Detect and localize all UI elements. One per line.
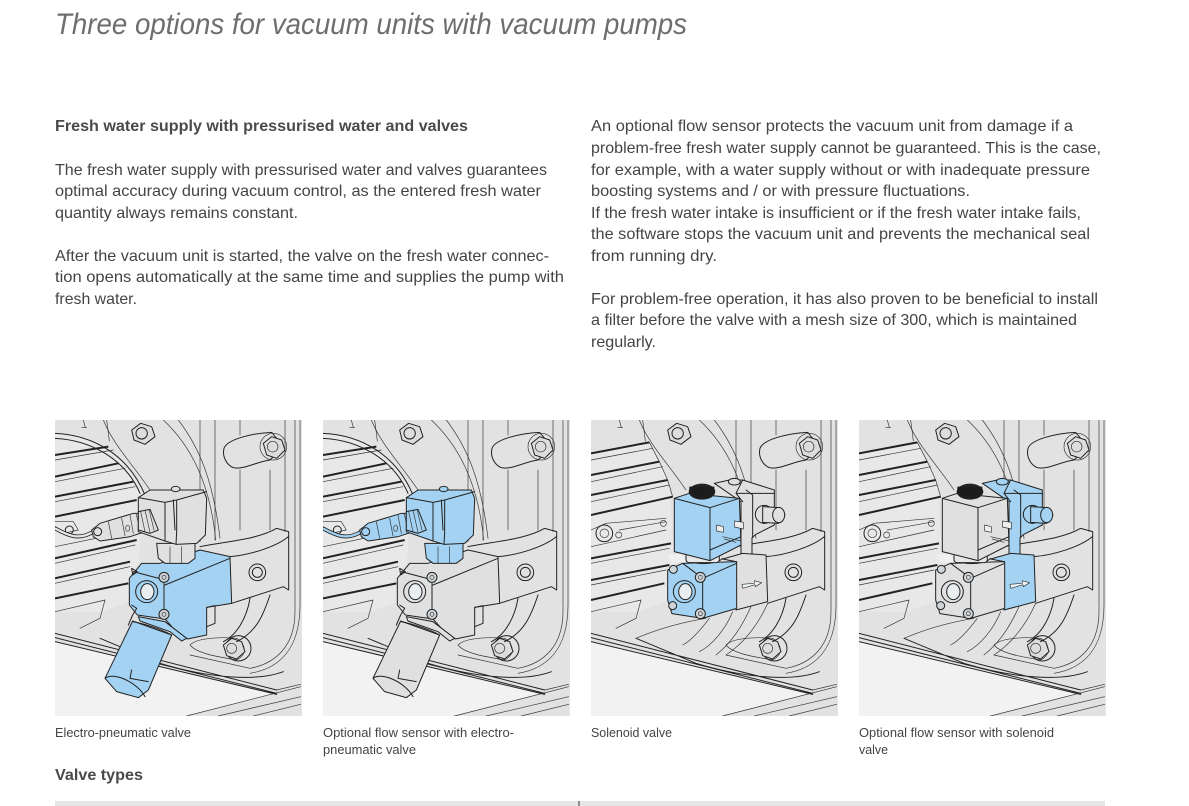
heading: fresh water supply: Fresh water supply with pressurised water and valves bbox=[55, 118, 468, 135]
paragraph: flow sensor protection: from running dry. bbox=[591, 248, 717, 265]
paragraph: flow sensor protection: An optional flow sensor protects the vacuum unit from damage if a bbox=[591, 118, 1073, 135]
paragraph: filter advice: regularly. bbox=[591, 334, 656, 351]
paragraph: valve opening: fresh water. bbox=[55, 291, 137, 308]
caption: flow sensor with solenoid valve bbox=[859, 726, 1054, 757]
paragraph: flow sensor protection: If the fresh water intake is insufficient or if the fresh water intake fails, bbox=[591, 205, 1081, 222]
table header band bbox=[55, 801, 1105, 806]
paragraph: filter advice: For problem-free operation, it has also proven to be beneficial to install bbox=[591, 291, 1098, 308]
paragraph: accuracy: quantity always remains constant. bbox=[55, 205, 298, 222]
paragraph: accuracy bbox=[55, 162, 547, 222]
paragraph: valve opening bbox=[55, 248, 564, 308]
illustration: optional flow sensor with electro-pneumatic valve bbox=[323, 420, 570, 716]
text column: flow sensor bbox=[591, 118, 1101, 351]
paragraph: valve opening: tion opens automatically at the same time and supplies the pump with bbox=[55, 269, 564, 286]
paragraph: filter advice: a filter before the valve with a mesh size of 300, which is maintained bbox=[591, 312, 1077, 329]
caption: flow sensor with solenoid valve: valve bbox=[859, 743, 888, 757]
caption: flow sensor with electro-pneumatic valve: pneumatic valve bbox=[323, 743, 416, 757]
caption: electro-pneumatic valve: Electro-pneumatic valve bbox=[55, 726, 191, 740]
heading: valve types: Valve types bbox=[55, 767, 143, 784]
paragraph: flow sensor protection bbox=[591, 118, 1101, 265]
caption: flow sensor with electro-pneumatic valve bbox=[323, 726, 514, 757]
caption: flow sensor with solenoid valve: Optional flow sensor with solenoid bbox=[859, 726, 1054, 740]
caption: solenoid valve: Solenoid valve bbox=[591, 726, 672, 740]
paragraph: flow sensor protection: the software stops the vacuum unit and prevents the mechanical seal bbox=[591, 226, 1090, 243]
paragraph: accuracy: optimal accuracy during vacuum control, as the entered fresh water bbox=[55, 183, 542, 200]
paragraph: filter advice bbox=[591, 291, 1098, 351]
illustration: electro-pneumatic valve bbox=[55, 420, 302, 716]
illustration: optional flow sensor with solenoid valve bbox=[859, 420, 1106, 716]
title: Three options for vacuum units with vacuum pumps bbox=[55, 8, 687, 41]
paragraph: flow sensor protection: boosting systems and / or with pressure fluctuations. bbox=[591, 183, 970, 200]
illustration: solenoid valve bbox=[591, 420, 838, 716]
paragraph: valve opening: After the vacuum unit is started, the valve on the fresh water connec- bbox=[55, 248, 549, 265]
caption: flow sensor with electro-pneumatic valve: Optional flow sensor with electro- bbox=[323, 726, 514, 740]
text column: fresh water supply bbox=[55, 118, 564, 308]
paragraph: accuracy: The fresh water supply with pressurised water and valves guarantees bbox=[55, 162, 547, 179]
paragraph: flow sensor protection: for example, with a water supply without or with inadequate pressure bbox=[591, 162, 1090, 179]
paragraph: flow sensor protection: problem-free fresh water supply cannot be guaranteed. This is the case, bbox=[591, 140, 1101, 157]
